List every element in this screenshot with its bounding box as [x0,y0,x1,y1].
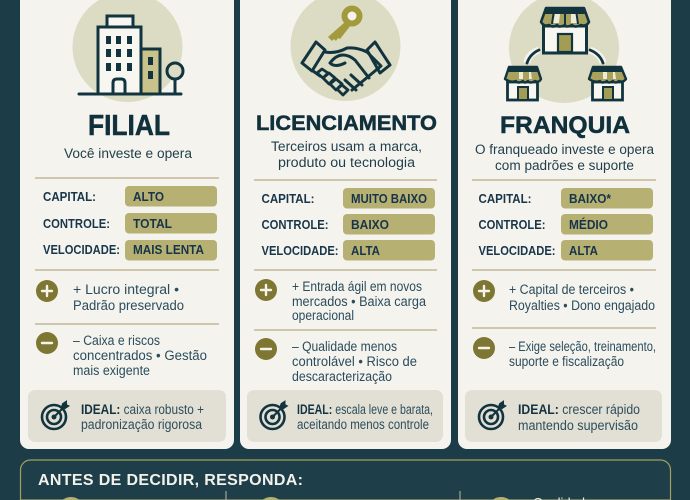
ideal callout: filial [28,390,226,442]
subtitle: filial: Você investe e opera [64,146,192,161]
panel: licenciamento [240,0,451,449]
attribute rows: franquia: CONTROLE: [478,218,546,232]
attribute rows: filial [43,186,217,260]
pros: filial: Padrão preservado [73,298,184,313]
ideal callout: licenciamento: IDEAL: escala leve e barata, [297,402,433,417]
subtitle: franquia [475,142,654,173]
subtitle: licenciamento [271,139,422,170]
attribute rows: licenciamento: VELOCIDADE: [262,244,338,258]
ideal callout: franquia [465,390,662,442]
subtitle: licenciamento: produto ou tecnologia [278,155,416,170]
attribute rows: franquia: VELOCIDADE: [478,244,556,258]
icon: handshake and key [290,0,400,101]
attribute rows: franquia: CAPITAL: [478,192,532,206]
question badge 3 [492,497,510,500]
ideal callout: franquia: mantendo supervisão [518,418,638,433]
pros: franquia: + Capital de terceiros • [509,282,634,297]
attribute rows: licenciamento [262,188,435,260]
attribute rows: filial: ALTO [133,190,164,204]
pros: licenciamento: mercados • Baixa carga [292,294,426,309]
pros: licenciamento: + Entrada ágil em novos [292,279,422,294]
cons: filial: mais exigente [73,363,150,378]
panel: franquia [458,0,671,449]
pros: filial: + Lucro integral • [73,282,179,297]
panel: antes de decidir [20,460,670,500]
cons: franquia: – Exige seleção, treinamento, [509,339,656,354]
attribute rows: licenciamento: ALTA [351,244,380,258]
pros: filial [36,280,184,313]
ideal callout: filial: IDEAL: caixa robusto + [81,402,204,417]
cons: licenciamento [255,338,417,384]
cons: licenciamento: controlável • Risco de [292,354,417,369]
question badge 1 [62,497,80,500]
pros: licenciamento [255,279,426,323]
attribute rows: franquia: MÉDIO [569,217,608,232]
ideal callout: licenciamento: aceitando menos controle [297,417,429,432]
pros: franquia: Royalties • Dono engajado [509,298,655,313]
attribute rows: filial: TOTAL [133,217,172,231]
heading: franquia: FRANQUIA [500,112,630,139]
ideal callout: filial: padronização rigorosa [81,417,202,432]
cons: filial [36,332,207,378]
ideal callout: franquia: IDEAL: crescer rápido [518,402,640,417]
attribute rows: filial: CAPITAL: [43,190,96,204]
heading: filial: FILIAL [88,110,170,142]
attribute rows: franquia: BAIXO* [569,192,611,206]
attribute rows: licenciamento: MUITO BAIXO [351,192,427,206]
heading: licenciamento: LICENCIAMENTO [256,112,437,135]
cons: franquia: suporte e fiscalização [509,354,624,369]
icon: office building [72,0,183,102]
attribute rows: filial: VELOCIDADE: [43,243,120,257]
attribute rows: filial: CONTROLE: [43,217,110,231]
subtitle: franquia: O franqueado investe e opera [475,142,654,157]
subtitle: licenciamento: Terceiros usam a marca, [271,139,422,154]
attribute rows: licenciamento: CONTROLE: [262,218,328,232]
cons: franquia [473,337,656,369]
attribute rows: licenciamento: BAIXO [351,218,389,232]
cons: licenciamento: descaracterização [292,369,392,384]
attribute rows: franquia: ALTA [569,244,598,258]
icon: franchise stores [505,0,626,103]
heading: antes de decidir: ANTES DE DECIDIR, RESPONDA: [38,472,303,489]
panel: filial [20,0,234,449]
subtitle: franquia: com padrões e suporte [495,158,634,173]
pros: franquia [473,280,655,313]
ideal callout: licenciamento [247,390,443,442]
attribute rows: franquia [478,188,653,260]
attribute rows: licenciamento: CAPITAL: [262,192,314,206]
cons: filial: – Caixa e riscos [73,333,160,348]
cons: filial: concentrados • Gestão [73,348,207,363]
attribute rows: filial: MAIS LENTA [133,243,204,257]
cons: licenciamento: – Qualidade menos [292,339,397,354]
pros: licenciamento: operacional [292,308,354,323]
question badge 2 [262,497,280,500]
